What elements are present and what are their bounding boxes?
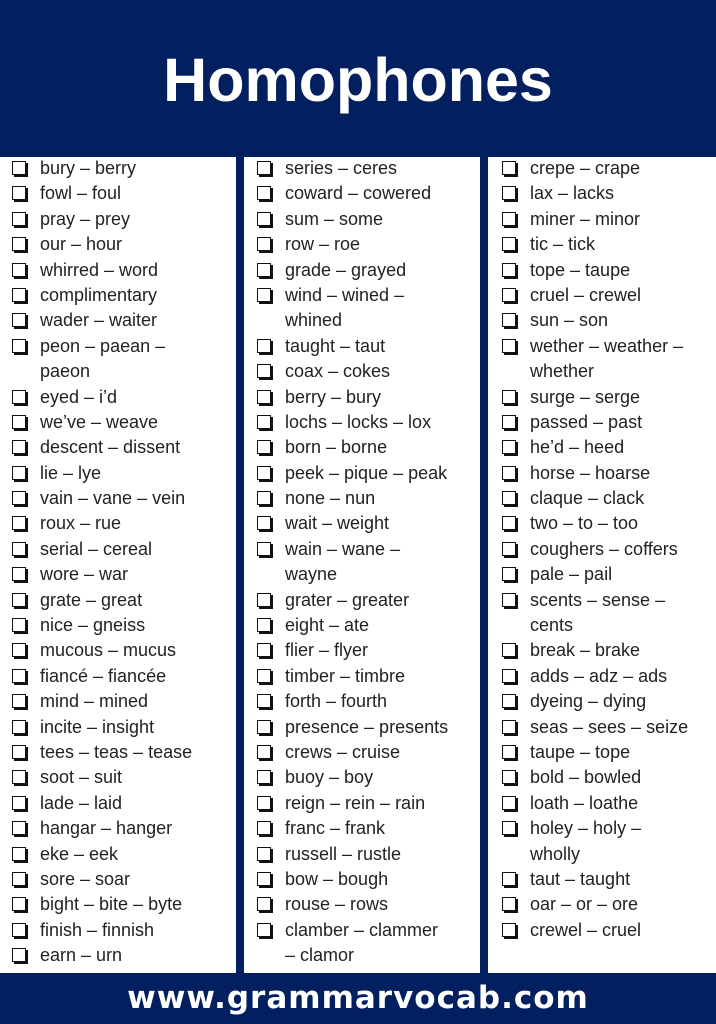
list: column 1: tees – teas – tease [40, 742, 192, 762]
list: column 1: mind – mined [40, 691, 148, 711]
list: column 3: oar – or – ore [530, 894, 638, 914]
list: column 1: bury – berry [40, 158, 136, 178]
list: column 2: peek – pique – peak [285, 463, 447, 483]
list: column 1: hangar – hanger [40, 818, 172, 838]
list: column 3: tope – taupe [530, 260, 630, 280]
list: column 3: break – brake [530, 640, 640, 660]
list: column 2: crews – cruise [285, 742, 400, 762]
list: column 1 [12, 158, 192, 965]
list: column 2: coward – cowered [285, 183, 431, 203]
list: column 1: pray – prey [40, 209, 130, 229]
list: column 2: rouse – rows [285, 894, 388, 914]
list: column 3: surge – serge [530, 387, 640, 407]
list: column 1: peon – paean – [40, 336, 165, 356]
list: column 3 [502, 158, 688, 940]
list: column 2: presence – presents [285, 717, 448, 737]
list: column 3: coughers – coffers [530, 539, 678, 559]
footer url: www.grammarvocab.com [127, 980, 589, 1016]
list: column 3: miner – minor [530, 209, 640, 229]
list: column 2: whined [285, 310, 342, 330]
list: column 2: row – roe [285, 234, 360, 254]
header [0, 0, 716, 157]
list: column 3: passed – past [530, 412, 642, 432]
list: column 2: franc – frank [285, 818, 385, 838]
list: column 3: lax – lacks [530, 183, 614, 203]
list: column 1: roux – rue [40, 513, 121, 533]
list: column 2: eight – ate [285, 615, 369, 635]
list: column 1: descent – dissent [40, 437, 180, 457]
list: column 1: we’ve – weave [40, 412, 158, 432]
list: column 2: taught – taut [285, 336, 385, 356]
list: column 1: soot – suit [40, 767, 122, 787]
list: column 2: clamber – clammer [285, 920, 438, 940]
list: column 1: fowl – foul [40, 183, 121, 203]
list: column 2: russell – rustle [285, 844, 401, 864]
list: column 1: complimentary [40, 285, 157, 305]
list: column 2: berry – bury [285, 387, 381, 407]
list: column 3: loath – loathe [530, 793, 638, 813]
list: column 3: taupe – tope [530, 742, 630, 762]
list: column 1: our – hour [40, 234, 122, 254]
list: column 1: incite – insight [40, 717, 154, 737]
footer url [0, 973, 716, 1024]
list: column 1: whirred – word [40, 260, 158, 280]
list: column 2: reign – rein – rain [285, 793, 425, 813]
list: column 1: lade – laid [40, 793, 122, 813]
list: column 1: wore – war [40, 564, 128, 584]
list: column 1: vain – vane – vein [40, 488, 185, 508]
panel: column 3 background [488, 157, 716, 973]
list: column 1: wader – waiter [40, 310, 157, 330]
list: column 3: bold – bowled [530, 767, 641, 787]
list: column 2: wait – weight [285, 513, 389, 533]
list: column 3: scents – sense – [530, 590, 665, 610]
list: column 2: timber – timbre [285, 666, 405, 686]
list: column 1: sore – soar [40, 869, 130, 889]
list: column 1: serial – cereal [40, 539, 152, 559]
list: column 3: crewel – cruel [530, 920, 641, 940]
list: column 3: he’d – heed [530, 437, 624, 457]
list: column 2: wain – wane – [285, 539, 400, 559]
list: column 1: finish – finnish [40, 920, 154, 940]
list: column 1: eyed – i’d [40, 387, 117, 407]
list: column 1: earn – urn [40, 945, 122, 965]
list: column 3: whether [530, 361, 594, 381]
list: column 1: paeon [40, 361, 90, 381]
list: column 2: grater – greater [285, 590, 409, 610]
list: column 2: buoy – boy [285, 767, 373, 787]
list: column 3: two – to – too [530, 513, 638, 533]
list: column 1: nice – gneiss [40, 615, 145, 635]
list: column 3: crepe – crape [530, 158, 640, 178]
list: column 2: flier – flyer [285, 640, 368, 660]
list: column 3: sun – son [530, 310, 608, 330]
list: column 3: wholly [530, 844, 580, 864]
list: column 1: eke – eek [40, 844, 118, 864]
list: column 2: grade – grayed [285, 260, 406, 280]
list: column 2: wayne [285, 564, 337, 584]
list: column 3: adds – adz – ads [530, 666, 667, 686]
list: column 3: horse – hoarse [530, 463, 650, 483]
list: column 3: pale – pail [530, 564, 612, 584]
title: Homophones [163, 46, 553, 114]
list: column 3: taut – taught [530, 869, 630, 889]
list: column 3: holey – holy – [530, 818, 641, 838]
list: column 1: grate – great [40, 590, 142, 610]
list: column 1: mucous – mucus [40, 640, 176, 660]
list: column 3: cents [530, 615, 573, 635]
list: column 1: bight – bite – byte [40, 894, 182, 914]
list: column 2: sum – some [285, 209, 383, 229]
list: column 3: seas – sees – seize [530, 717, 688, 737]
list: column 2: born – borne [285, 437, 387, 457]
list: column 2: none – nun [285, 488, 375, 508]
panel: column 1 background [0, 157, 236, 973]
list: column 2: series – ceres [285, 158, 397, 178]
list: column 2: bow – bough [285, 869, 388, 889]
panel: column 2 background [244, 157, 480, 973]
list: column 3: wether – weather – [530, 336, 683, 356]
list: column 1: fiancé – fiancée [40, 666, 166, 686]
list: column 3: claque – clack [530, 488, 644, 508]
list: column 2: – clamor [285, 945, 354, 965]
list: column 3: tic – tick [530, 234, 595, 254]
list: column 2: lochs – locks – lox [285, 412, 431, 432]
list: column 3: cruel – crewel [530, 285, 641, 305]
list: column 2 [257, 158, 448, 965]
list: column 2: forth – fourth [285, 691, 387, 711]
list: column 3: dyeing – dying [530, 691, 646, 711]
list: column 1: lie – lye [40, 463, 101, 483]
list: column 2: wind – wined – [285, 285, 404, 305]
list: column 2: coax – cokes [285, 361, 390, 381]
